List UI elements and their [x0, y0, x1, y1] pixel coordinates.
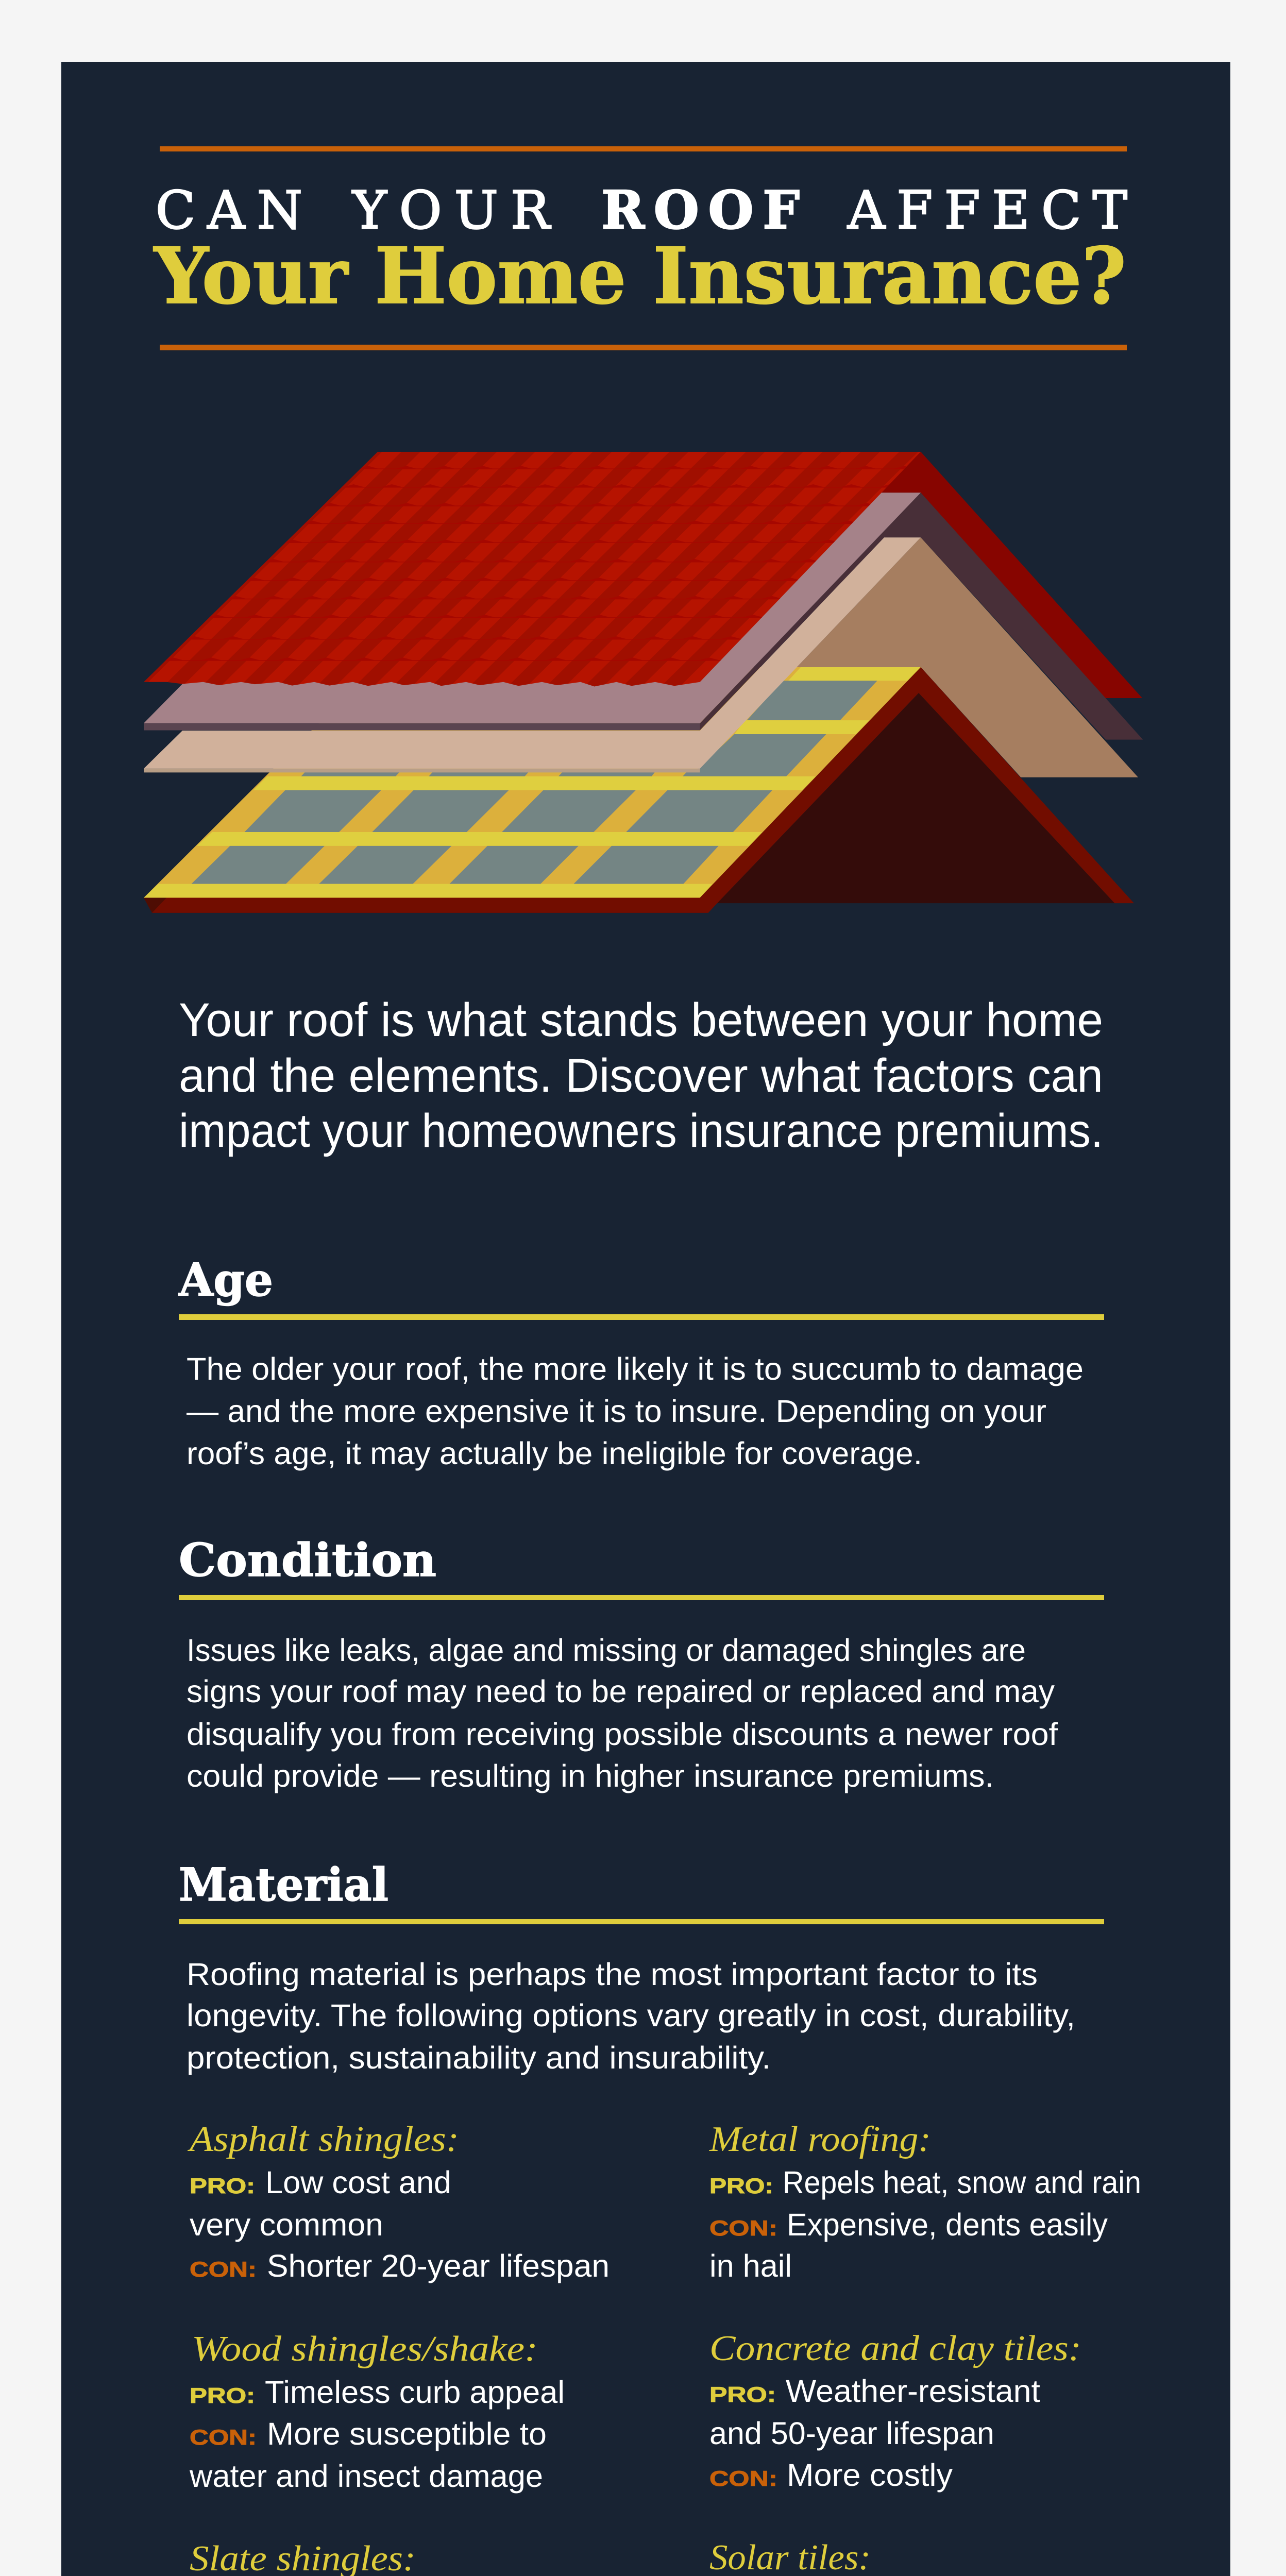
rafter frame [144, 667, 921, 897]
material: concrete and clay tiles: More costly [787, 2458, 953, 2493]
material: metal roofing [709, 2120, 1141, 2283]
material: asphalt shingles: CON: [190, 2257, 257, 2281]
material: asphalt shingles: PRO: [190, 2174, 255, 2198]
heading: age: Age [178, 1253, 273, 1307]
underlayment front edge [144, 723, 700, 731]
age rule [179, 1314, 1104, 1320]
title line 1: AFFECT [847, 180, 1127, 241]
underlayment side [700, 493, 1143, 740]
material: wood shingles/shake: CON: [190, 2425, 257, 2449]
material rule [179, 1919, 1104, 1924]
material: wood shingles/shake: PRO: [190, 2383, 255, 2408]
intro text: Your roof is what stands between your home [179, 994, 1103, 1046]
condition body text: could provide — resulting in higher insurance premiums. [187, 1758, 994, 1793]
age body text: roof’s age, it may actually be ineligible for coverage. [187, 1436, 922, 1471]
material: wood shingles/shake [189, 2329, 565, 2494]
heading: material: Material [179, 1858, 388, 1911]
intro text [179, 994, 1103, 1157]
material body text: protection, sustainability and insurability. [187, 2040, 771, 2075]
age body text [187, 1351, 1084, 1471]
age body text: — and the more expensive it is to insure. Depending on your [187, 1394, 1046, 1429]
title line 2: Your Home Insurance? [153, 231, 1126, 321]
material: wood shingles/shake: Wood shingles/shake: [192, 2329, 538, 2369]
material: wood shingles/shake: Timeless curb appeal [265, 2375, 565, 2410]
roof layers illustration [109, 450, 1143, 913]
material: metal roofing: CON: [709, 2216, 777, 2240]
title line 1: YOUR [351, 180, 551, 241]
material: concrete and clay tiles [709, 2329, 1081, 2493]
material: metal roofing: Metal roofing: [709, 2120, 931, 2159]
age body text: The older your roof, the more likely it is to succumb to damage [187, 1351, 1084, 1386]
intro text: and the elements. Discover what factors can [179, 1049, 1103, 1102]
gable interior [717, 693, 1114, 903]
material: metal roofing: Repels heat, snow and rain [783, 2165, 1141, 2200]
underlayment top [144, 493, 921, 723]
material: metal roofing: in hail [709, 2248, 792, 2283]
title line 1 [156, 179, 1127, 241]
title block [153, 146, 1127, 350]
section: age [178, 1253, 1104, 1471]
gable fascia [144, 667, 1134, 913]
decking top [144, 537, 921, 769]
material: concrete and clay tiles: CON: [709, 2466, 777, 2490]
material: concrete and clay tiles: Concrete and clay tiles: [709, 2329, 1081, 2368]
condition body text: disqualify you from receiving possible discounts a newer roof [187, 1717, 1058, 1752]
bottom orange rule [160, 345, 1127, 350]
title line 1: CAN [156, 180, 302, 241]
material: concrete and clay tiles: Weather-resistant [786, 2374, 1040, 2409]
decking side [700, 537, 1138, 777]
material: asphalt shingles: Low cost and [265, 2165, 451, 2200]
condition body text: signs your roof may need to be repaired or replaced and may [187, 1674, 1055, 1709]
red shingles [144, 451, 921, 686]
material body text: Roofing material is perhaps the most important factor to its [187, 1957, 1038, 1992]
condition body text [187, 1633, 1058, 1793]
material: metal roofing: Expensive, dents easily [787, 2207, 1108, 2242]
condition rule [179, 1595, 1104, 1600]
material: concrete and clay tiles: PRO: [709, 2382, 776, 2406]
material: metal roofing: PRO: [709, 2174, 773, 2198]
shingle layer side [881, 452, 1142, 698]
material: asphalt shingles [188, 2120, 610, 2283]
material body text: longevity. The following options vary greatly in cost, durability, [187, 1998, 1075, 2033]
decking front edge [144, 769, 700, 772]
intro text: impact your homeowners insurance premiums. [179, 1105, 1103, 1157]
material: asphalt shingles: Asphalt shingles: [188, 2120, 459, 2159]
material: wood shingles/shake: More susceptible to [267, 2416, 547, 2451]
material: asphalt shingles: Shorter 20-year lifespan [267, 2248, 610, 2283]
material body text [187, 1957, 1075, 2075]
material: concrete and clay tiles: and 50-year lifespan [709, 2416, 994, 2451]
material: asphalt shingles: very common [190, 2207, 383, 2242]
title line 1: ROOF [601, 179, 800, 241]
heading: condition: Condition [179, 1533, 436, 1587]
section: material [179, 1858, 1104, 2075]
condition body text: Issues like leaks, algae and missing or damaged shingles are [187, 1633, 1026, 1668]
material: wood shingles/shake: water and insect damage [189, 2459, 543, 2494]
top orange rule [160, 146, 1127, 151]
fascia corner shadow [144, 897, 166, 913]
section: condition [179, 1533, 1104, 1793]
